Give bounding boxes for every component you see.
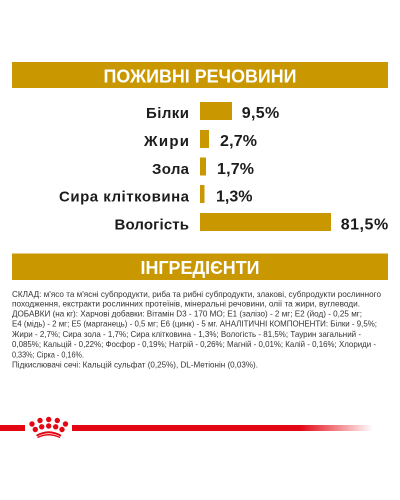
text block: ingredients	[12, 289, 381, 370]
row: ash	[152, 158, 254, 178]
text block: ingredients: Е4 (мідь) - 2 мг; Е5 (марганець) - 0,5 мг; Е6 (цинк) - 5 мг. АНАЛІТИЧНІ КОМПОНЕНТИ: Білки - 9,5%;	[12, 318, 377, 328]
text block: ingredients: 0,33%; Сірка - 0,16%.	[12, 350, 84, 360]
row: moisture: 81,5%	[341, 216, 388, 234]
text block: ingredients: Підкислювачі сечі: Кальцій сульфат (0,25%), DL-Метіонін (0,03%).	[12, 360, 258, 370]
row: moisture: Вологість	[114, 216, 189, 234]
row: crude fibre: Сира клітковина	[59, 189, 190, 206]
panel: nutrients heading	[12, 62, 388, 88]
panel: nutrients heading: ПОЖИВНІ РЕЧОВИНИ	[104, 66, 296, 87]
icon: royal crown logo	[29, 417, 68, 438]
text block: ingredients: СКЛАД: м'ясо та м'ясні субпродукти, риба та рибні субпродукти, злакові, субпродукти рослинного	[12, 289, 381, 299]
bar chart: nutrients	[59, 102, 388, 234]
panel: ingredients heading: ІНГРЕДІЄНТИ	[140, 257, 260, 278]
row: protein: 9,5%	[242, 105, 279, 122]
row: protein: Білки	[146, 105, 189, 122]
row: ash: Зола	[152, 161, 190, 178]
footer: solid part of red line	[72, 425, 300, 431]
row: crude fibre: 1,3%	[216, 189, 252, 206]
panel: ingredients heading	[12, 254, 388, 280]
text block: ingredients: 0,085%; Кальцій - 0,22%; Фосфор - 0,19%; Натрій - 0,26%; Магній - 0,01%; Калій - 0,16%; Хлориди -	[12, 339, 376, 349]
row: crude fibre	[59, 185, 252, 206]
footer: red line right	[72, 425, 373, 431]
row: protein	[146, 102, 279, 122]
footer: red line left	[0, 425, 25, 431]
text block: ingredients: ДОБАВКИ (на кг): Харчові добавки: Вітамін D3 - 170 МО; Е1 (залізо) - 2 мг; Е2 (йод) - 0,25 мг;	[12, 308, 362, 318]
row: fat	[143, 130, 257, 150]
text block: ingredients: походження, екстракти рослинних протеїнів, мінеральні речовини, олії та жири, вуглеводи.	[12, 298, 360, 308]
row: ash: 1,7%	[217, 161, 254, 178]
row: moisture	[114, 213, 388, 234]
row: fat: 2,7%	[220, 133, 257, 150]
text block: ingredients: Жири - 2,7%; Сира зола - 1,7%; Сира клітковина - 1,3%; Вологість - 81,5%; Таурин загальний -	[12, 329, 361, 339]
row: fat: Жири	[143, 133, 189, 150]
